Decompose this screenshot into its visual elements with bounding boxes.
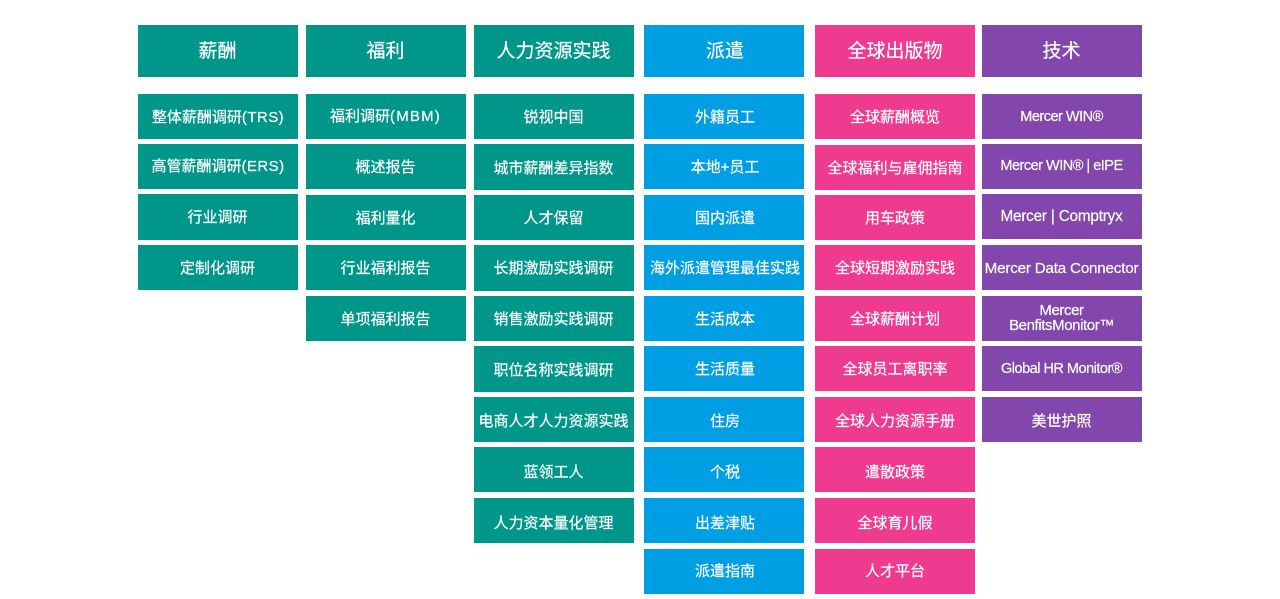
heading: 福利: 福利 [366, 40, 404, 62]
item: 遣散政策 [815, 447, 975, 492]
column: 技术 [982, 25, 1142, 442]
heading: 薪酬: 薪酬 [198, 40, 236, 62]
heading: 派遣: 派遣 [706, 40, 744, 62]
item: 全球薪酬概览: 全球薪酬概览 [850, 108, 940, 126]
item: 全球福利与雇佣指南: 全球福利与雇佣指南 [827, 160, 962, 177]
item: 外籍员工 [644, 94, 804, 139]
item: Mercer WIN eIPE: Mercer WIN® | eIPE [1000, 158, 1123, 174]
item: 外籍员工: 外籍员工 [695, 108, 755, 126]
item: 出差津贴: 出差津贴 [695, 514, 755, 532]
item: 生活成本: 生活成本 [695, 310, 755, 328]
column: 派遣 [644, 25, 804, 594]
item: 国内派遣 [644, 195, 804, 240]
heading: 人力资源实践: 人力资源实践 [496, 40, 610, 62]
item: 销售激励实践调研 [474, 296, 634, 341]
item: 人力资本量化管理: 人力资本量化管理 [493, 514, 614, 532]
item: Mercer WIN: Mercer WIN® [1020, 108, 1103, 124]
heading: 派遣 [644, 25, 804, 77]
item: Mercer WIN [982, 94, 1142, 139]
item: 长期激励实践调研 [474, 245, 634, 291]
column: 薪酬 [138, 25, 298, 290]
item: 福利调研: 福利调研(MBM) [330, 108, 441, 125]
item: 职位名称实践调研: 职位名称实践调研 [493, 362, 614, 378]
item: 美世护照: 美世护照 [1031, 412, 1092, 430]
item: 行业福利报告: 行业福利报告 [340, 260, 430, 276]
item: 全球育儿假: 全球育儿假 [857, 514, 932, 532]
item: 行业调研: 行业调研 [187, 209, 248, 226]
item: Mercer BenfitsMonitor: BenfitsMonitor™ [1009, 316, 1114, 334]
item: 用车政策 [815, 195, 975, 240]
item: 销售激励实践调研: 销售激励实践调研 [493, 310, 614, 328]
item: 人才保留: 人才保留 [523, 210, 584, 226]
item: 全球人力资源手册 [815, 397, 975, 442]
item: 人才平台: 人才平台 [865, 563, 925, 580]
item: 住房 [644, 397, 804, 442]
item: 福利调研 [306, 94, 466, 139]
item: 人才保留 [474, 195, 634, 240]
item: 全球福利与雇佣指南 [815, 145, 975, 190]
item: 生活成本 [644, 296, 804, 341]
item: 城市薪酬差异指数: 城市薪酬差异指数 [493, 160, 614, 176]
item: 职位名称实践调研 [474, 346, 634, 392]
heading: 人力资源实践 [474, 25, 634, 77]
item: 高管薪酬调研: 高管薪酬调研(ERS) [151, 158, 285, 175]
item: 高管薪酬调研 [138, 144, 298, 189]
item: 美世护照 [982, 397, 1142, 442]
item: 本地+员工 [644, 144, 804, 189]
item: 用车政策: 用车政策 [865, 210, 925, 226]
item: 个税 [644, 447, 804, 492]
item: 定制化调研: 定制化调研 [180, 260, 255, 276]
item: 派遣指南 [644, 549, 804, 594]
item: Mercer BenfitsMonitor: Mercer [1039, 302, 1084, 319]
item: 定制化调研 [138, 245, 298, 290]
item: 全球人力资源手册: 全球人力资源手册 [835, 412, 955, 430]
item: 遣散政策: 遣散政策 [865, 464, 925, 481]
heading: 全球出版物 [815, 25, 975, 77]
item: 单项福利报告 [306, 296, 466, 341]
item: 全球短期激励实践 [815, 245, 975, 290]
item: 国内派遣: 国内派遣 [695, 210, 755, 226]
item: Global HR Monitor [982, 346, 1142, 391]
item: 人力资本量化管理 [474, 498, 634, 543]
item: Mercer BenfitsMonitor [982, 296, 1142, 341]
item: 生活质量 [644, 346, 804, 391]
item: 整体薪酬调研 [138, 94, 298, 139]
item: 全球员工离职率: 全球员工离职率 [842, 361, 948, 378]
item: 锐视中国 [474, 94, 634, 139]
item: 个税: 个税 [710, 464, 740, 481]
column: 人力资源实践 [474, 25, 634, 543]
item: 全球员工离职率 [815, 346, 975, 391]
item: 长期激励实践调研: 长期激励实践调研 [493, 260, 614, 277]
item: 单项福利报告: 单项福利报告 [340, 310, 430, 328]
item: Mercer Comptryx: Mercer | Comptryx [1000, 208, 1123, 225]
item: 派遣指南: 派遣指南 [695, 563, 755, 580]
item: 住房: 住房 [710, 412, 740, 430]
item: 本地+员工: 本地+员工 [691, 159, 759, 176]
item: 全球育儿假 [815, 498, 975, 543]
item: 行业调研 [138, 194, 298, 240]
column: 全球出版物 [815, 25, 975, 594]
item: 概述报告 [306, 144, 466, 189]
item: Global HR Monitor: Global HR Monitor® [1001, 361, 1122, 377]
item: 全球薪酬概览 [815, 94, 975, 139]
heading: 技术 [982, 25, 1142, 77]
item: Mercer Data Connector [982, 245, 1142, 290]
item: Mercer Comptryx [982, 194, 1142, 239]
item: 蓝领工人: 蓝领工人 [523, 464, 584, 481]
item: 蓝领工人 [474, 447, 634, 492]
heading: 福利 [306, 25, 466, 77]
item: 海外派遣管理最佳实践: 海外派遣管理最佳实践 [650, 260, 800, 276]
item: 行业福利报告 [306, 245, 466, 290]
item: 福利量化 [306, 195, 466, 240]
item: Mercer WIN eIPE [982, 144, 1142, 189]
item: 概述报告: 概述报告 [355, 159, 416, 176]
item: Mercer Data Connector: Mercer Data Connector [985, 260, 1138, 276]
item: 电商人才人力资源实践 [474, 397, 634, 442]
item: 全球薪酬计划: 全球薪酬计划 [850, 310, 940, 328]
item: 电商人才人力资源实践: 电商人才人力资源实践 [478, 412, 628, 430]
item: 海外派遣管理最佳实践 [644, 245, 804, 290]
heading: 技术: 技术 [1042, 40, 1080, 62]
item: 生活质量: 生活质量 [695, 361, 755, 378]
item: 全球短期激励实践: 全球短期激励实践 [835, 260, 955, 276]
heading: 全球出版物: 全球出版物 [847, 40, 942, 62]
item: 人才平台 [815, 549, 975, 594]
item: 出差津贴 [644, 498, 804, 543]
item: 整体薪酬调研: 整体薪酬调研(TRS) [152, 108, 284, 126]
heading: 薪酬 [138, 25, 298, 77]
column: 福利 [306, 25, 466, 341]
item: 福利量化: 福利量化 [355, 210, 416, 226]
item: 锐视中国: 锐视中国 [523, 108, 584, 126]
item: 全球薪酬计划 [815, 296, 975, 341]
item: 城市薪酬差异指数 [474, 144, 634, 190]
